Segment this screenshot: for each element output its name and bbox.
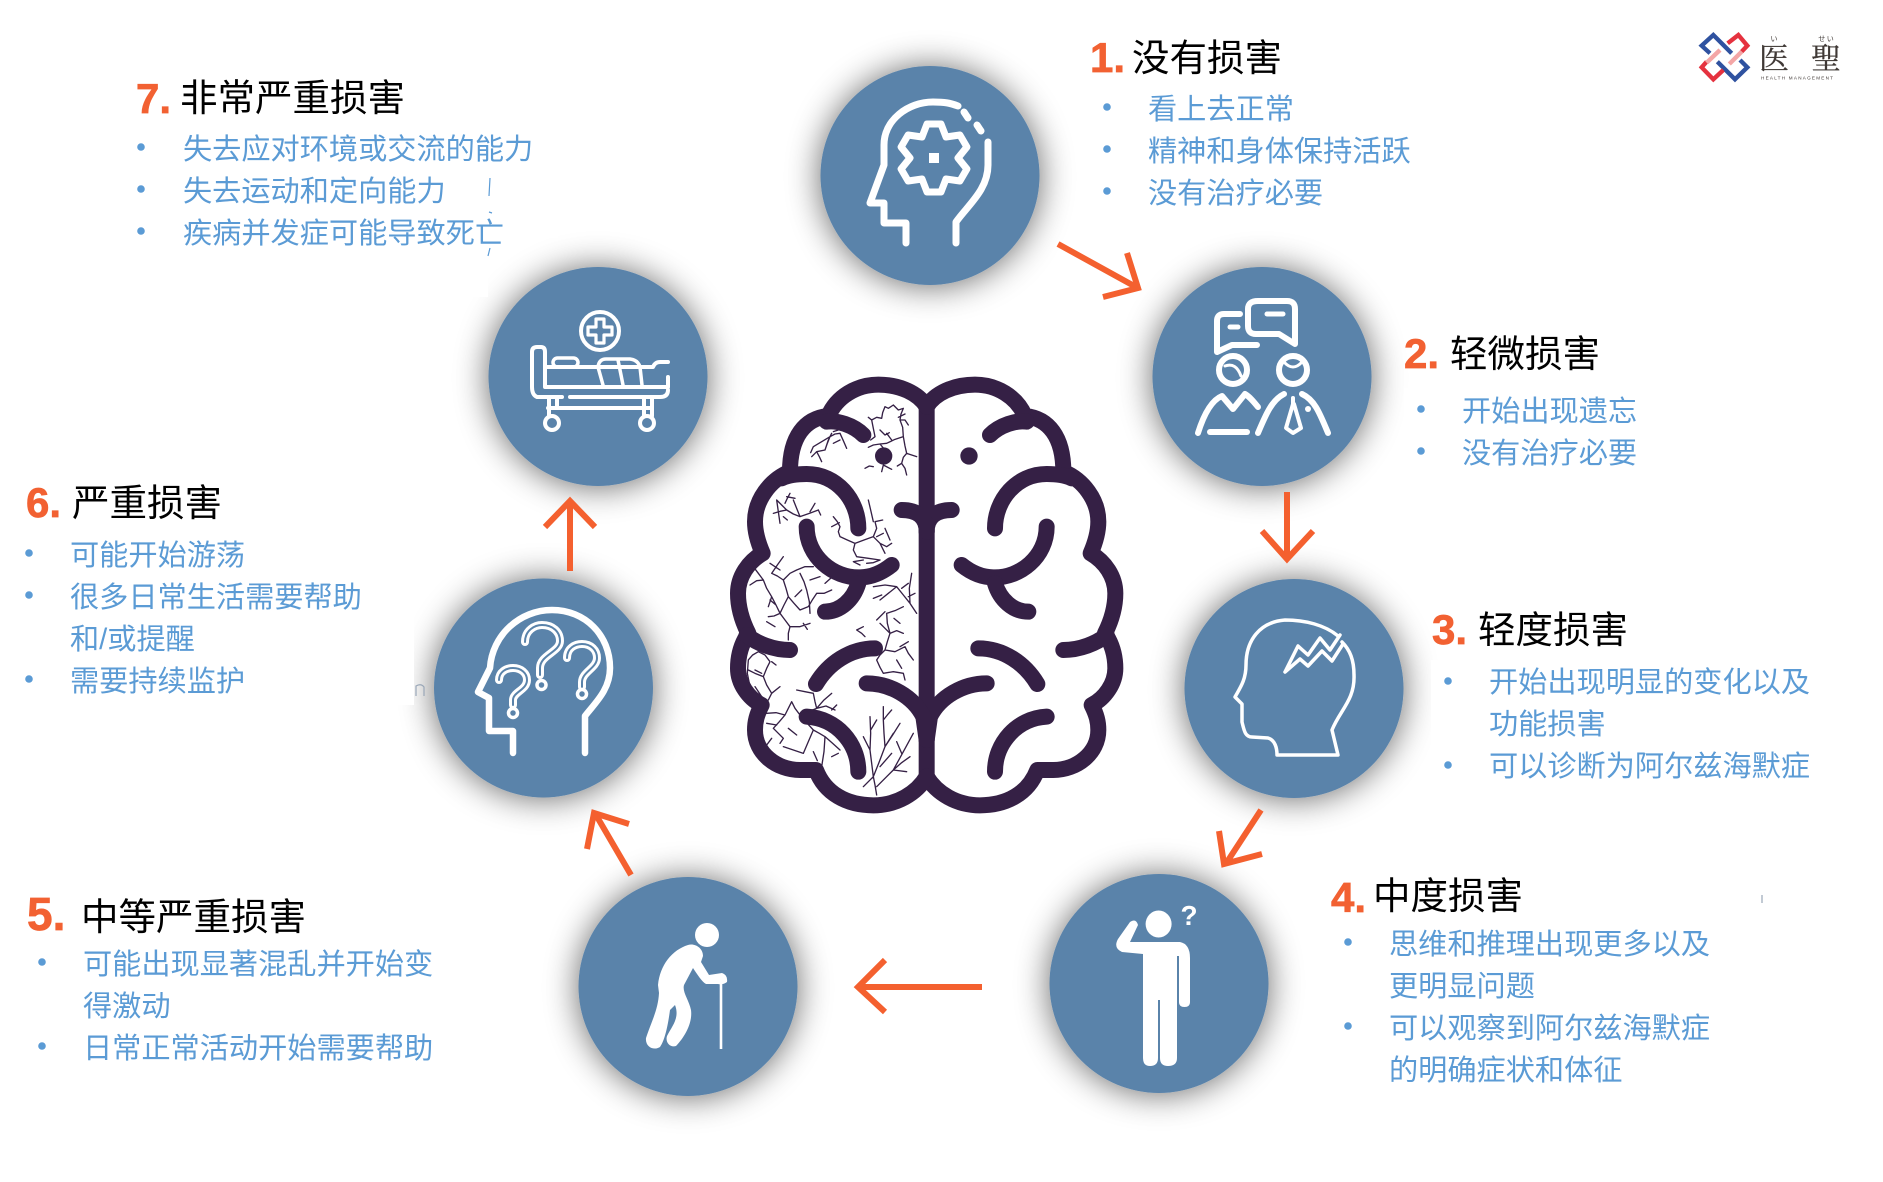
brain illustration bbox=[738, 385, 1115, 805]
panel: stage 5 text: 可能出现显著混乱并开始变 bbox=[83, 948, 433, 981]
circle disc: stage 6 bbox=[434, 578, 653, 798]
logo: 医聖 Health Management bbox=[1702, 34, 1841, 80]
panel: stage 4 text: 更明显问题 bbox=[1389, 971, 1535, 1003]
arrow: stage 4 to 5 bbox=[858, 960, 982, 1012]
panel: stage 2 text bbox=[1404, 330, 1637, 470]
heading: stage 4 bbox=[1331, 874, 1523, 921]
icon: head with gear bbox=[870, 102, 988, 243]
heading: stage 2: 轻微损害 bbox=[1450, 333, 1600, 375]
icon: head with question marks bbox=[478, 610, 610, 753]
brain dots bbox=[875, 447, 978, 465]
panel: stage 4 text bbox=[1331, 874, 1710, 1087]
arrow: stage 2 to 3 bbox=[1262, 492, 1313, 560]
panel: stage 3 text: 可以诊断为阿尔兹海默症 bbox=[1489, 750, 1810, 783]
circle disc: stage 4 bbox=[1050, 874, 1268, 1093]
stray scan marks bbox=[416, 178, 1762, 903]
circle disc: stage 7 bbox=[488, 267, 708, 486]
heading: stage 1: 1. bbox=[1090, 34, 1125, 81]
arrow: stage 6 to 7 bbox=[545, 501, 595, 571]
arrow: stage 5 to 6 bbox=[587, 813, 631, 875]
icon: elderly person with cane bbox=[646, 923, 727, 1049]
heading: stage 3: 3. bbox=[1432, 606, 1467, 653]
heading: stage 7: 7. bbox=[136, 75, 171, 122]
heading: stage 5: 中等严重损害 bbox=[81, 896, 306, 938]
icon: two people talking bbox=[1198, 301, 1328, 433]
panel: stage 4 text: 的明确症状和体征 bbox=[1389, 1054, 1622, 1087]
heading: stage 6 bbox=[26, 479, 222, 526]
panel: stage 2 text: 没有治疗必要 bbox=[1462, 437, 1637, 470]
logo: 医聖 Health Management: 医 bbox=[1759, 34, 1789, 78]
heading: stage 2: 2. bbox=[1404, 330, 1439, 377]
heading: stage 1 bbox=[1090, 34, 1282, 81]
icon: head with crack bbox=[1235, 620, 1354, 755]
arrow: stage 1 to 2 bbox=[1058, 244, 1138, 297]
heading: stage 7: 非常严重损害 bbox=[180, 77, 405, 119]
panel: stage 7 text: 疾病并发症可能导致死亡 bbox=[183, 217, 504, 250]
heading: stage 5 bbox=[27, 888, 306, 940]
panel: stage 7 text: 失去运动和定向能力 bbox=[183, 175, 446, 208]
panel: stage 4 text: 思维和推理出现更多以及 bbox=[1389, 928, 1710, 961]
circle disc: stage 1 bbox=[820, 66, 1040, 285]
white text backing boxes bbox=[0, 40, 1883, 810]
heading: stage 3 bbox=[1432, 606, 1628, 653]
panel: stage 1 text bbox=[1090, 34, 1411, 210]
panel: stage 6 text: 可能开始游荡 bbox=[70, 539, 245, 572]
icon: person scratching head with question mark bbox=[1116, 900, 1198, 1066]
brain damage cracks bbox=[747, 405, 917, 795]
heading: stage 1: 没有损害 bbox=[1132, 37, 1282, 79]
heading: stage 4: 4. bbox=[1331, 874, 1366, 921]
circle disc: stage 5 bbox=[578, 877, 798, 1096]
icon: person scratching head with question mark: ? bbox=[1180, 900, 1198, 931]
panel: stage 6 text: 很多日常生活需要帮助 bbox=[70, 581, 362, 614]
panel: stage 5 text: 日常正常活动开始需要帮助 bbox=[83, 1032, 433, 1065]
circle disc: stage 3 bbox=[1184, 579, 1404, 798]
logo: 医聖 Health Management: 聖 bbox=[1811, 34, 1841, 78]
panel: stage 7 text: 失去应对环境或交流的能力 bbox=[183, 133, 533, 166]
panel: stage 2 text: 开始出现遗忘 bbox=[1462, 395, 1637, 428]
logo: 医聖 Health Management: せ い bbox=[1818, 34, 1834, 44]
icon: hospital bed with medical cross bbox=[532, 312, 668, 430]
logo: 医聖 Health Management: HEALTH MANAGEMENT bbox=[1761, 76, 1834, 80]
panel: stage 6 text: 需要持续监护 bbox=[70, 665, 245, 698]
panel: stage 3 text: 功能损害 bbox=[1489, 708, 1606, 741]
brain hemisphere outline and folds bbox=[738, 385, 1115, 805]
panel: stage 4 text: 可以观察到阿尔兹海默症 bbox=[1389, 1012, 1710, 1045]
heading: stage 6: 6. bbox=[26, 479, 61, 526]
heading: stage 5: 5. bbox=[27, 888, 65, 940]
panel: stage 5 text: 得激动 bbox=[83, 990, 171, 1023]
heading: stage 6: 严重损害 bbox=[72, 482, 222, 524]
panel: stage 1 text: 精神和身体保持活跃 bbox=[1148, 135, 1411, 168]
panel: stage 3 text bbox=[1432, 606, 1810, 783]
panel: stage 5 text bbox=[27, 888, 433, 1065]
panel: stage 1 text: 看上去正常 bbox=[1148, 93, 1294, 126]
arrow: stage 3 to 4 bbox=[1219, 810, 1262, 864]
panel: stage 7 text bbox=[136, 75, 533, 250]
logo: 医聖 Health Management: い bbox=[1770, 34, 1778, 44]
panel: stage 6 text bbox=[25, 479, 362, 698]
panel: stage 1 text: 没有治疗必要 bbox=[1148, 177, 1323, 210]
panel: stage 3 text: 开始出现明显的变化以及 bbox=[1489, 666, 1810, 699]
heading: stage 2 bbox=[1404, 330, 1600, 377]
heading: stage 3: 轻度损害 bbox=[1478, 609, 1628, 651]
heading: stage 4: 中度损害 bbox=[1373, 875, 1523, 917]
panel: stage 6 text: 和/或提醒 bbox=[70, 623, 195, 656]
circle disc: stage 2 bbox=[1152, 267, 1372, 486]
